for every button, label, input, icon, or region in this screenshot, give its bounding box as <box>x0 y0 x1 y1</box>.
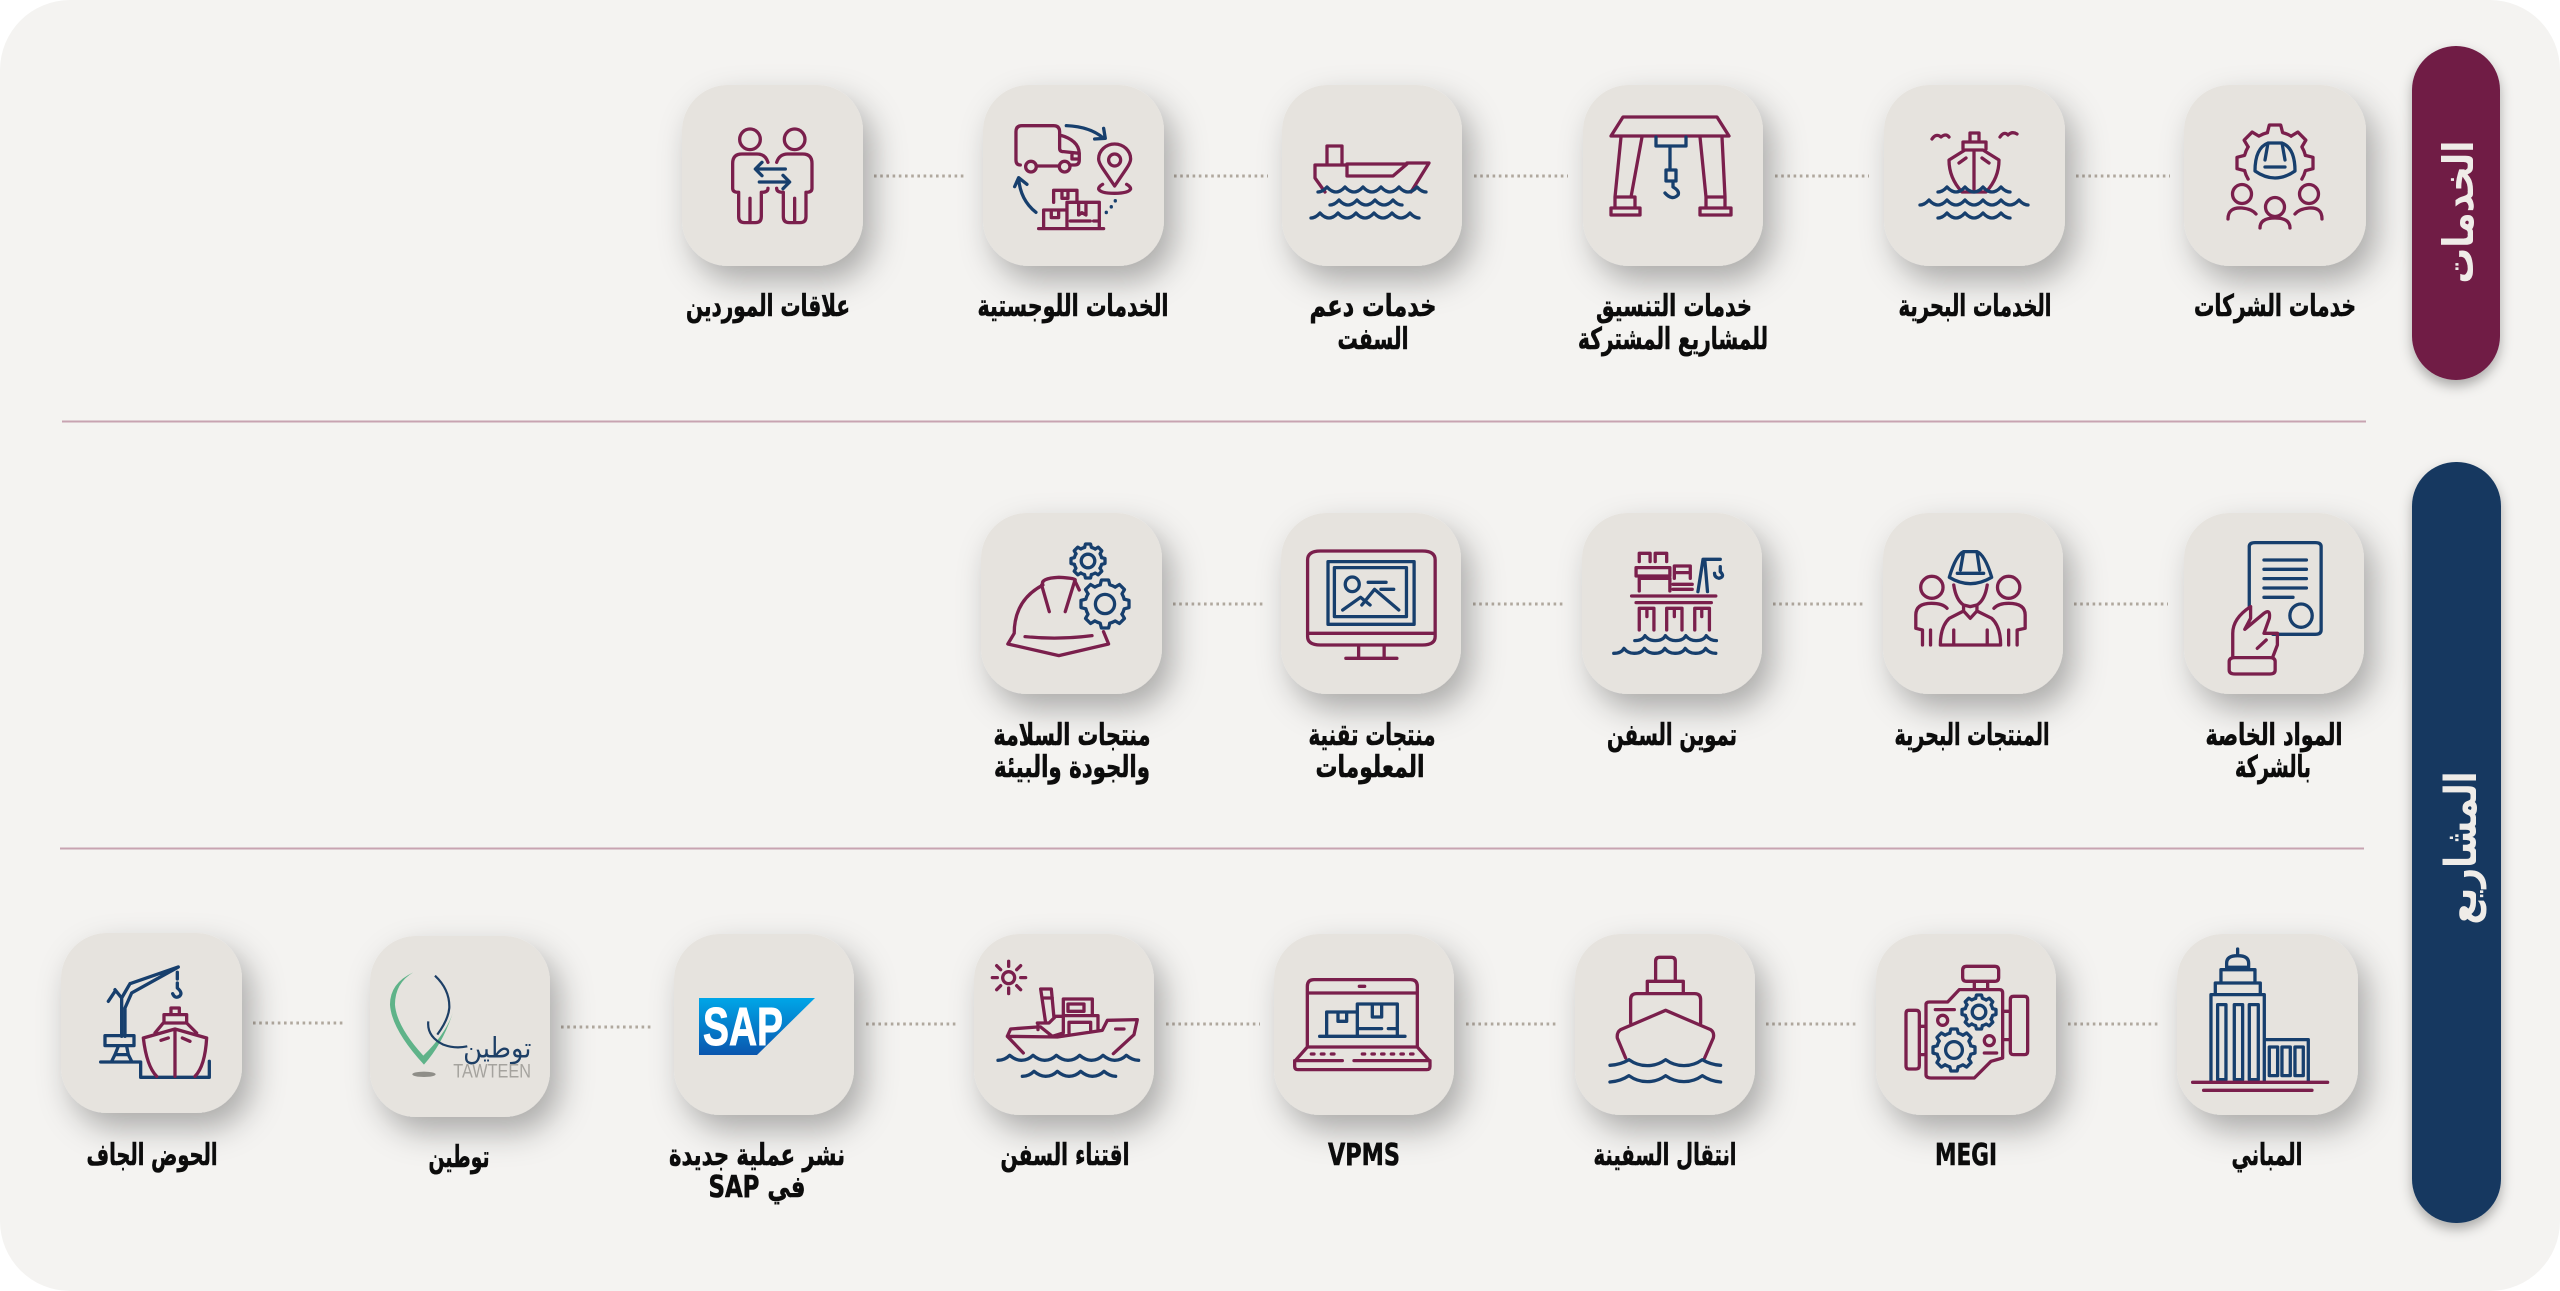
label: الخدمات البحرية <box>1898 289 2052 324</box>
label: خدمات دعم <box>1310 289 1436 324</box>
icon: workers with helmet <box>1916 552 2025 645</box>
label: الحوض الجاف <box>86 1138 218 1173</box>
card: ship acquisition <box>974 934 1154 1173</box>
icon: Tawteen logo: TAWTEEN <box>453 1062 531 1083</box>
label: اقتناء السفن <box>1000 1138 1130 1173</box>
icon: laptop with boxes <box>1295 980 1430 1070</box>
card: shipyard support <box>1282 85 1462 357</box>
label: في SAP <box>708 1170 806 1205</box>
card: ship supply <box>1582 513 1762 753</box>
label: بالشركة <box>2235 750 2311 785</box>
divider lines <box>60 422 2366 848</box>
label <box>669 1138 845 1205</box>
icon: computer monitor <box>1308 551 1435 658</box>
label: منتجات السلامة <box>994 718 1150 753</box>
icon: engine <box>1906 966 2028 1078</box>
card: corporate services <box>2184 85 2366 324</box>
icon: gear, helmet and people <box>2228 125 2322 228</box>
icon: sun and tug ship <box>992 961 1139 1076</box>
icon: helmet and gears <box>1008 544 1129 656</box>
label <box>1310 289 1436 357</box>
label: VPMS <box>1328 1138 1400 1173</box>
label: خدمات التنسيق <box>1596 289 1752 324</box>
icon: tower building <box>2193 949 2328 1090</box>
label: المعلومات <box>1316 750 1424 785</box>
pill: services heading: الخدمات <box>2434 140 2483 284</box>
label: انتقال السفينة <box>1594 1138 1736 1173</box>
card: VPMS <box>1274 934 1454 1173</box>
label: المواد الخاصة <box>2206 718 2342 753</box>
card: logistics services <box>978 85 1168 324</box>
label <box>1308 718 1436 785</box>
label: الخدمات اللوجستية <box>978 289 1168 324</box>
card: joint project coordination <box>1578 85 1768 357</box>
card: buildings <box>2177 934 2358 1173</box>
label: خدمات الشركات <box>2194 289 2356 324</box>
card: supplier relations <box>682 85 863 324</box>
label: توطين <box>428 1140 490 1175</box>
icon: two people exchanging <box>733 129 812 223</box>
card: company materials <box>2184 513 2364 785</box>
icon: cargo ship <box>1311 146 1429 218</box>
icon: Tawteen logo <box>390 972 531 1083</box>
card: safety and quality products <box>981 513 1162 785</box>
label <box>994 718 1150 785</box>
label: MEGI <box>1935 1138 1997 1173</box>
card: ship transfer <box>1575 934 1755 1173</box>
icon: SAP logo: SAP <box>703 997 783 1057</box>
pill: projects heading: المشاريع <box>2436 772 2487 924</box>
label: علاقات الموردين <box>686 289 850 324</box>
icon: ship on waves <box>1920 133 2028 218</box>
pill: projects heading <box>2412 462 2501 1223</box>
icon: offshore platform <box>1614 553 1723 653</box>
label <box>2206 718 2342 785</box>
icon: ship front view <box>1610 957 1721 1082</box>
card: SAP rollout <box>669 934 854 1205</box>
card: marine products <box>1883 513 2063 753</box>
icon: crane and ship in dock <box>101 967 209 1077</box>
card: IT products <box>1281 513 1461 785</box>
icon: truck, pin and boxes <box>1015 126 1131 229</box>
label <box>1578 289 1768 357</box>
label: المنتجات البحرية <box>1894 718 2050 753</box>
card: dry dock <box>61 933 242 1173</box>
label: منتجات تقنية <box>1308 718 1436 753</box>
label: والجودة والبيئة <box>994 750 1150 785</box>
icon: gantry crane <box>1611 117 1731 215</box>
icon: Tawteen logo: توطين <box>463 1032 531 1065</box>
label: تموين السفن <box>1607 718 1737 753</box>
card: MEGI <box>1876 934 2056 1173</box>
pill: services heading <box>2412 46 2500 380</box>
label: المباني <box>2232 1138 2302 1173</box>
card: marine services <box>1884 85 2065 324</box>
label: للمشاريع المشتركة <box>1578 322 1768 357</box>
label: نشر عملية جديدة <box>669 1138 845 1173</box>
label: السفت <box>1338 322 1408 357</box>
icon: hand holding certificate <box>2229 543 2321 674</box>
card: Tawteen <box>370 936 550 1175</box>
dotted connectors <box>253 176 2170 1027</box>
